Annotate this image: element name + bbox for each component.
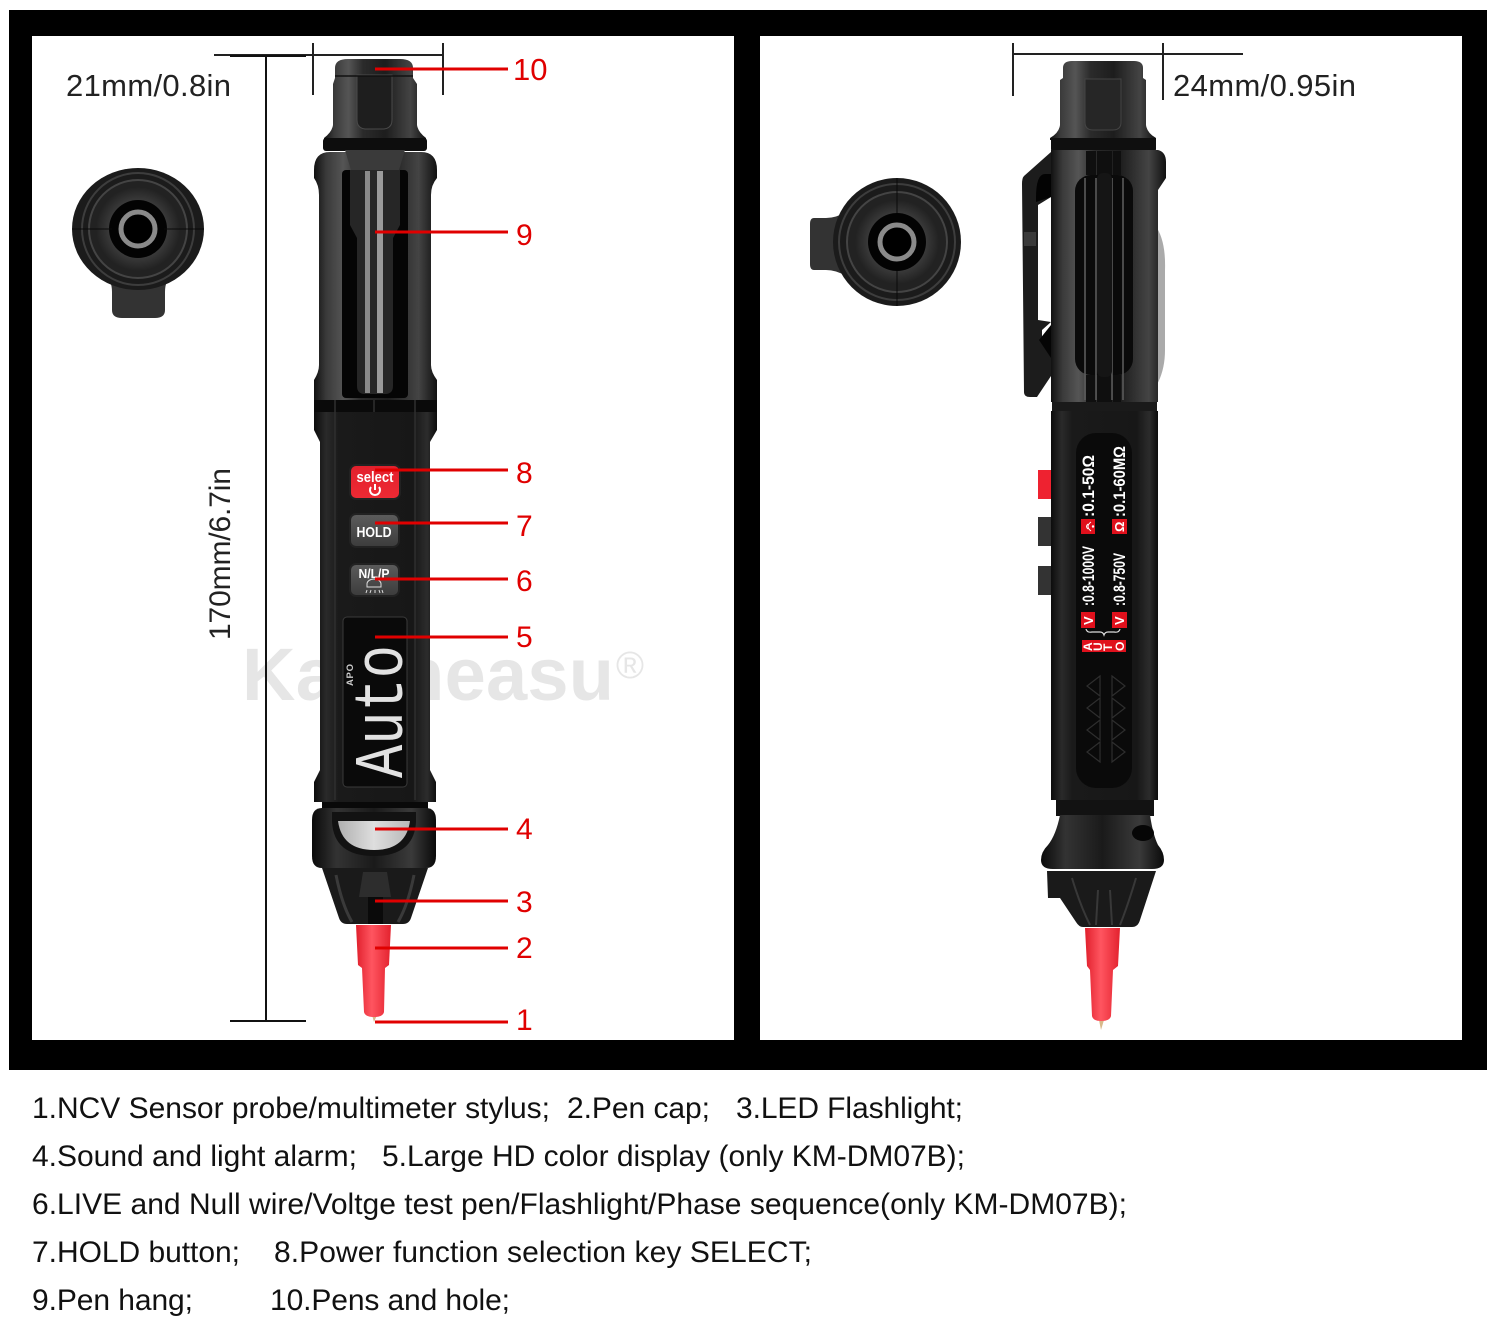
select button: select: [356, 469, 394, 486]
lower body: [314, 400, 437, 802]
cone: [1047, 871, 1156, 927]
callout 5: display: 5: [516, 621, 533, 654]
legend line 3: 6.LIVE and Null wire/Voltge test pen/Flashlight/Phase sequence(only KM-DM07B);: [32, 1188, 1127, 1221]
LCD display: APO: [345, 664, 356, 686]
icon: resistance tag: Ω: [1112, 522, 1127, 532]
spec panel: :0.8-750V: [1110, 553, 1129, 606]
dimension: length 170mm: 170mm/6.7in: [204, 468, 237, 640]
belt clip: [1022, 152, 1051, 397]
legend line 4: [32, 1236, 812, 1269]
callout 8: select key: 8: [516, 457, 533, 490]
callout 10: pen hole: 10: [513, 52, 547, 87]
select button: [350, 465, 400, 499]
legend line 2: 4.Sound and light alarm;: [32, 1140, 357, 1173]
legend line 1: 3.LED Flashlight;: [736, 1092, 963, 1125]
spec panel: [1076, 433, 1132, 788]
pen cap top: [323, 59, 427, 151]
red probe tip: [1085, 928, 1120, 1030]
head with hole: [1041, 800, 1164, 869]
icon: top view of pen, front: [72, 168, 204, 318]
side buttons: [1038, 470, 1053, 595]
legend line 1: [32, 1092, 963, 1125]
callout 7: hold button: 7: [516, 510, 533, 543]
legend line 2: 5.Large HD color display (only KM-DM07B);: [382, 1140, 965, 1173]
callout 2: pen cap: 2: [516, 932, 533, 965]
legend line 4: 8.Power function selection key SELECT;: [274, 1236, 812, 1269]
cap and collar: [1050, 61, 1156, 151]
icon: continuity tag: [1081, 519, 1095, 534]
callout 6: NLP button: 6: [516, 565, 533, 598]
black frame: [9, 10, 1487, 1070]
spec panel: :0.8-1000V: [1079, 546, 1098, 606]
dimension: width 21mm: [66, 43, 443, 103]
legend line 5: [32, 1284, 510, 1317]
red probe tip: [356, 925, 391, 1022]
text block: parts legend: [32, 1092, 1127, 1317]
upper body and pen hanger: [314, 150, 437, 400]
brace: [1086, 629, 1120, 635]
icon: resistance tag: [1112, 519, 1127, 534]
icon: DC volt tag: V: [1081, 616, 1096, 625]
callout 9: pen hang: 9: [516, 219, 533, 252]
icon: DC volt tag: [1081, 612, 1096, 628]
legend line 4: 7.HOLD button;: [32, 1236, 240, 1269]
lower body: [1051, 411, 1158, 800]
dimension: width 24mm: 24mm/0.95in: [1173, 68, 1356, 103]
head with alarm lens: [312, 802, 436, 868]
watermark: Kaemeasu: [242, 633, 614, 716]
legend line 5: 10.Pens and hole;: [270, 1284, 510, 1317]
grip triangles: [1087, 676, 1125, 762]
legend line 2: [32, 1140, 965, 1173]
callout 3: flashlight: 3: [516, 886, 533, 919]
cone and LED: [322, 868, 428, 924]
legend line 5: 9.Pen hang;: [32, 1284, 193, 1317]
spec panel: :0.1-60MΩ: [1110, 446, 1129, 517]
LCD display: Auto: [345, 645, 424, 778]
pen: side view: [1022, 61, 1166, 1030]
hold button: [350, 514, 399, 547]
icon: top view of pen, side: [810, 178, 961, 306]
auto tag: AUTO: [1081, 642, 1127, 651]
upper body with slot: [1051, 150, 1166, 411]
dimension: width 24mm: [1013, 43, 1356, 103]
icon: AC volt tag: V: [1112, 616, 1127, 625]
panel: side view: [760, 36, 1462, 1040]
hold button: HOLD: [356, 525, 392, 541]
dimension: width 21mm: 21mm/0.8in: [66, 68, 231, 103]
panel: front view: [32, 36, 734, 1040]
icon: AC volt tag: [1112, 612, 1127, 628]
callout 4: alarm: 4: [516, 813, 533, 846]
N/L/P button: [350, 564, 399, 596]
grey side button: [1155, 225, 1165, 388]
N/L/P button: N/L/P: [358, 567, 390, 581]
legend line 1: 2.Pen cap;: [567, 1092, 710, 1125]
dimension: length 170mm: [204, 55, 306, 1021]
callout 1: probe: 1: [516, 1004, 533, 1037]
spec panel: :0.1-50Ω: [1079, 455, 1098, 517]
watermark: ®: [616, 645, 644, 687]
legend line 1: 1.NCV Sensor probe/multimeter stylus;: [32, 1092, 550, 1125]
pen: front view: [312, 59, 437, 1022]
